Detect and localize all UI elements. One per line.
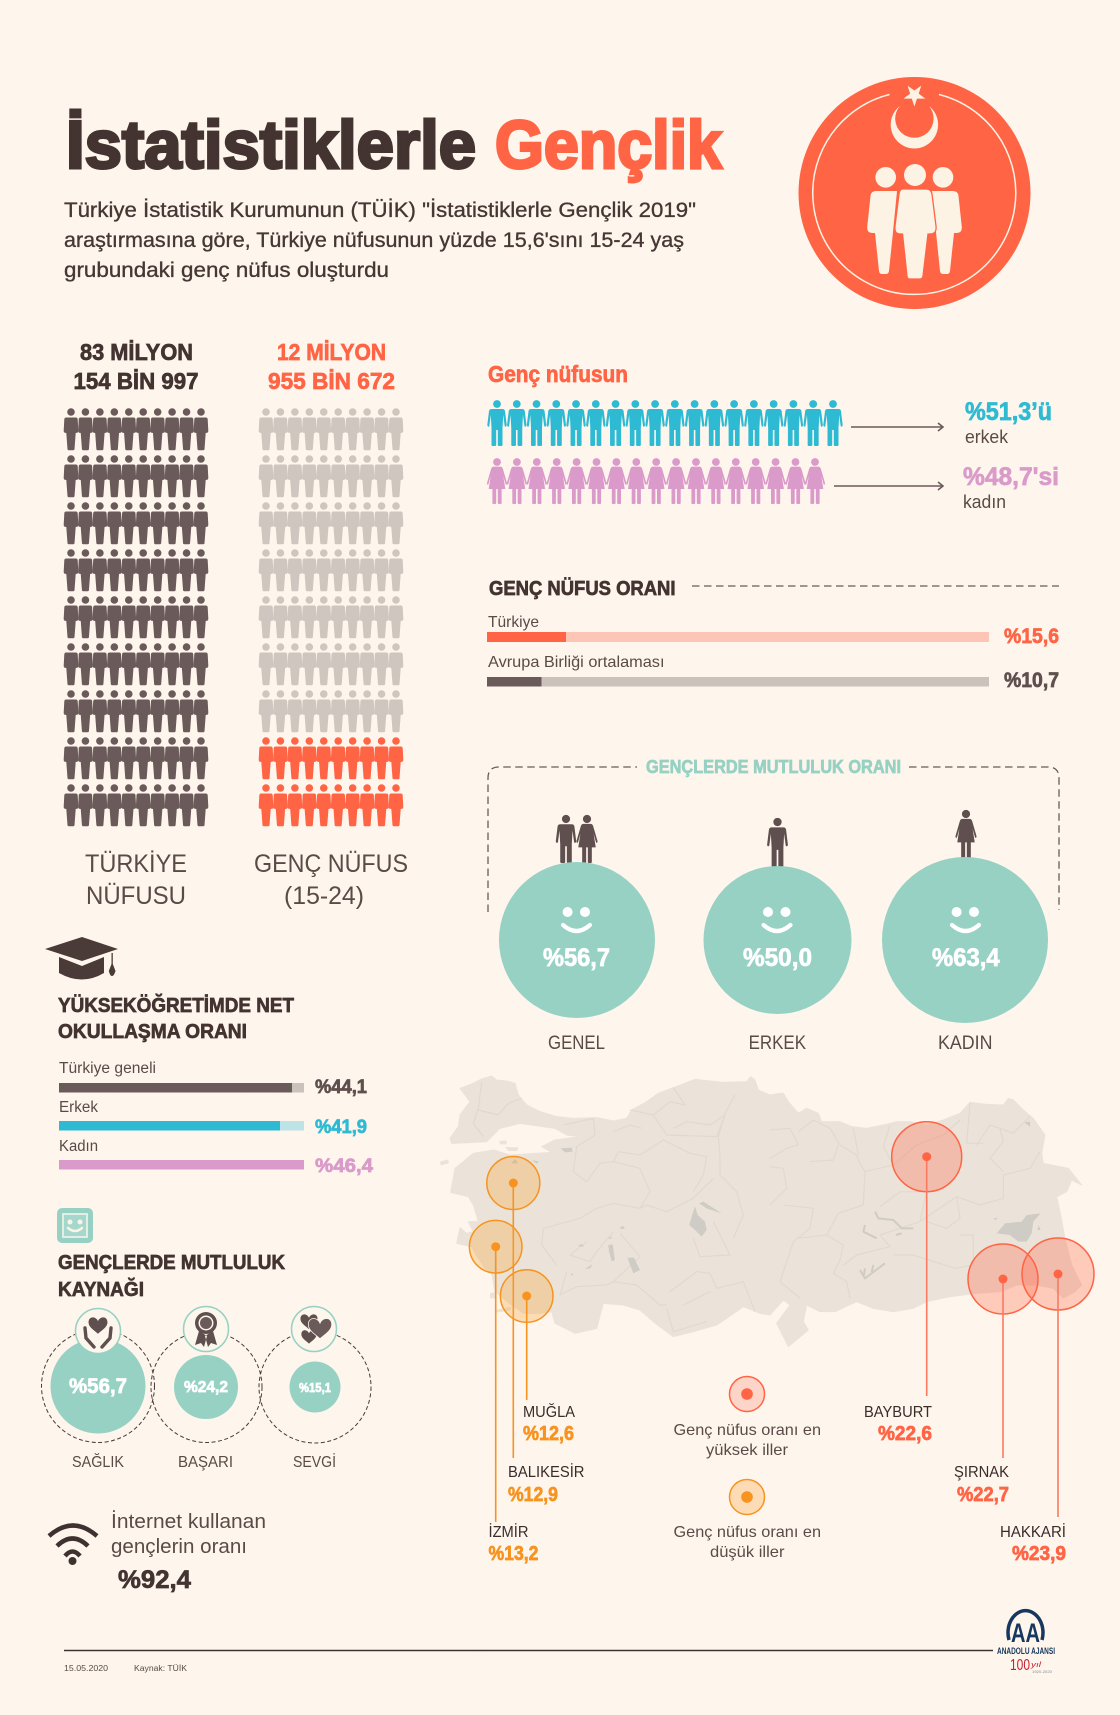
logo: Anadolu Ajansı: AA xyxy=(1011,1618,1040,1648)
footer date and source: 15.05.2020 xyxy=(64,1664,109,1673)
stat: internet use: gençlerin oranı xyxy=(111,1536,247,1558)
source: success: BAŞARI xyxy=(178,1454,233,1471)
happiness circle: general xyxy=(499,815,655,1054)
stat: female share: kadın xyxy=(963,492,1006,512)
logo: Anadolu Ajansı: yıl xyxy=(1030,1662,1042,1669)
label: Turkey population: TÜRKİYE xyxy=(85,849,187,878)
icon: crest emblem with crescent, star and people xyxy=(798,77,1030,309)
stat: male share: erkek xyxy=(965,427,1009,447)
stat: Turkey population: 154 BİN 997 xyxy=(74,368,198,394)
intro paragraph: grubundaki genç nüfus oluşturdu xyxy=(64,258,389,282)
source: health xyxy=(42,1308,154,1471)
stat: internet use xyxy=(111,1510,266,1594)
marker: Muğla: MUĞLA xyxy=(523,1404,576,1421)
marker: İzmir: %13,2 xyxy=(488,1543,538,1565)
heading: sources of happiness xyxy=(58,1252,286,1301)
bar chart: higher education enrolment: Erkek xyxy=(59,1099,98,1116)
icon: wifi xyxy=(49,1526,97,1565)
heading: youth population gender: Genç nüfusun xyxy=(488,361,628,387)
happiness circle: general: GENEL xyxy=(548,1033,605,1054)
bar chart: higher education enrolment: %41,9 xyxy=(315,1117,367,1138)
marker: İzmir xyxy=(469,1220,538,1565)
legend: lowest provinces: düşük iller xyxy=(710,1544,785,1561)
happiness circle: female xyxy=(882,810,1048,1054)
source: love xyxy=(259,1306,371,1471)
bar chart: higher education enrolment: %46,4 xyxy=(315,1156,373,1177)
stat: youth population: 12 MİLYON xyxy=(277,339,386,365)
marker: Hakkari: %23,9 xyxy=(1012,1543,1066,1565)
legend: highest provinces: Genç nüfus oranı en xyxy=(674,1422,821,1439)
bar chart: higher education enrolment: Türkiye geneli xyxy=(59,1060,156,1077)
bar chart: higher education enrolment: Kadın xyxy=(59,1138,98,1155)
arrow: male xyxy=(851,423,943,431)
marker: Şırnak: ŞIRNAK xyxy=(954,1464,1010,1481)
intro paragraph xyxy=(64,198,696,282)
heading: higher education xyxy=(58,993,294,1043)
source: success: %24,2 xyxy=(184,1379,228,1396)
bar chart: youth ratio xyxy=(487,614,1059,692)
bar chart: higher education enrolment xyxy=(59,1060,373,1177)
intro paragraph: Türkiye İstatistik Kurumunun (TÜİK) "İstatistiklerle Gençlik 2019" xyxy=(64,198,696,222)
label: youth population: GENÇ NÜFUS xyxy=(254,850,408,878)
pictogram: female row xyxy=(487,458,825,504)
bar chart: youth ratio: %15,6 xyxy=(1004,625,1059,648)
bar chart: higher education enrolment: %44,1 xyxy=(315,1077,367,1098)
intro paragraph: araştırmasına göre, Türkiye nüfusunun yüzde 15,6'sını 15-24 yaş xyxy=(64,228,684,252)
marker: Şırnak xyxy=(954,1244,1038,1506)
pictogram: Turkey population xyxy=(64,408,208,826)
source: love: SEVGİ xyxy=(293,1452,336,1471)
legend: highest provinces: yüksek iller xyxy=(706,1442,789,1459)
bar chart: youth ratio: Türkiye xyxy=(488,614,539,631)
marker: Muğla: %12,6 xyxy=(523,1423,574,1445)
heading: youth ratio: GENÇ NÜFUS ORANI xyxy=(489,577,676,600)
footer date and source: Kaynak: TÜİK xyxy=(134,1664,188,1673)
stat: internet use: İnternet kullanan xyxy=(111,1510,266,1533)
marker: Hakkari: HAKKARİ xyxy=(1000,1523,1066,1541)
marker: Hakkari xyxy=(1000,1238,1094,1565)
marker: Balıkesir: BALIKESİR xyxy=(508,1463,584,1481)
happiness circle: general: %56,7 xyxy=(543,944,610,972)
marker: Balıkesir xyxy=(487,1156,584,1506)
label: youth population: (15-24) xyxy=(284,882,364,910)
heading: higher education: YÜKSEKÖĞRETİMDE NET xyxy=(58,993,294,1017)
marker: Bayburt xyxy=(864,1122,962,1445)
legend: highest provinces xyxy=(674,1376,821,1459)
stat: youth population xyxy=(268,339,395,394)
stat: female share: %48,7'si xyxy=(963,463,1059,491)
bar chart: youth ratio: Avrupa Birliği ortalaması xyxy=(488,654,664,671)
happiness circle: male: %50,0 xyxy=(743,944,812,972)
source: love: %15,1 xyxy=(299,1380,331,1395)
map of Turkey xyxy=(440,1076,1082,1347)
footer date and source xyxy=(64,1664,188,1673)
logo: Anadolu Ajansı: ANADOLU AJANSI xyxy=(997,1646,1055,1656)
source: health: SAĞLIK xyxy=(72,1452,124,1471)
logo: Anadolu Ajansı: 100 xyxy=(1010,1657,1030,1674)
marker: İzmir: İZMİR xyxy=(488,1523,528,1541)
title: İstatistiklerle xyxy=(66,107,476,183)
heading: sources of happiness: GENÇLERDE MUTLULUK xyxy=(58,1252,286,1274)
arrow: female xyxy=(834,482,943,490)
marker: Balıkesir: %12,9 xyxy=(508,1484,558,1506)
stat: female share xyxy=(963,463,1059,512)
source: health: %56,7 xyxy=(69,1375,127,1398)
happiness circle: male xyxy=(704,818,852,1054)
footer rule xyxy=(64,1650,993,1652)
stat: Turkey population: 83 MİLYON xyxy=(80,339,193,365)
bar chart: youth ratio: %10,7 xyxy=(1004,669,1059,692)
label: youth population xyxy=(254,850,408,910)
logo: Anadolu Ajansı: 1920-2020 xyxy=(1032,1669,1053,1674)
title: Gençlik xyxy=(495,107,722,183)
marker: Muğla xyxy=(500,1270,576,1445)
source: success xyxy=(151,1306,262,1471)
marker: Bayburt: %22,6 xyxy=(878,1423,932,1445)
icon: smiling square xyxy=(57,1208,93,1243)
title xyxy=(66,107,722,183)
heading: higher education: OKULLAŞMA ORANI xyxy=(58,1021,247,1043)
pictogram: youth population xyxy=(259,408,403,826)
stat: male share: %51,3’ü xyxy=(965,398,1052,426)
marker: Bayburt: BAYBURT xyxy=(864,1404,933,1421)
logo: Anadolu Ajansı xyxy=(997,1611,1055,1674)
stat: Turkey population xyxy=(74,339,198,394)
happiness circle: female: KADIN xyxy=(938,1033,992,1054)
heading: happiness rate: GENÇLERDE MUTLULUK ORANI xyxy=(646,757,901,777)
stat: internet use: %92,4 xyxy=(118,1566,191,1594)
marker: Şırnak: %22,7 xyxy=(957,1484,1009,1506)
heading: sources of happiness: KAYNAĞI xyxy=(58,1277,144,1301)
happiness circle: female: %63,4 xyxy=(932,944,1000,972)
stat: male share xyxy=(965,398,1052,447)
stat: youth population: 955 BİN 672 xyxy=(268,368,395,394)
label: Turkey population xyxy=(85,849,187,910)
icon: graduation cap xyxy=(45,937,118,980)
pictogram: male row xyxy=(487,400,843,446)
happiness circle: male: ERKEK xyxy=(749,1033,806,1054)
label: Turkey population: NÜFUSU xyxy=(86,882,186,910)
legend: lowest provinces xyxy=(674,1480,821,1561)
legend: lowest provinces: Genç nüfus oranı en xyxy=(674,1524,821,1541)
